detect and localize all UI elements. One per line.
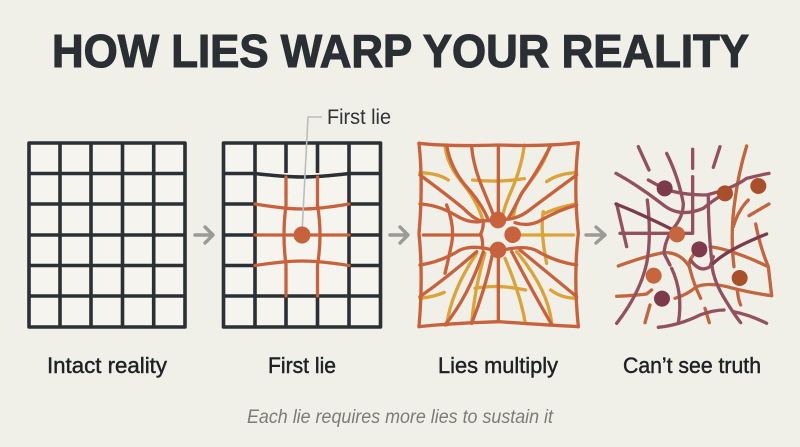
callout: first lie: First lie: [327, 105, 391, 129]
arrow: lies multiply to can't see truth: [586, 227, 605, 243]
dark plum fragments: [616, 204, 767, 263]
arrow: intact to first lie: [195, 227, 213, 243]
panel: intact reality grid: [29, 143, 185, 327]
leader line: first lie: [302, 117, 322, 233]
plum fragments: [616, 147, 769, 327]
panel: broken grid: [616, 146, 772, 327]
scattered lie nodes: [646, 178, 766, 307]
title: HOW LIES WARP YOUR REALITY: [52, 25, 749, 77]
label: first lie: First lie: [268, 353, 336, 378]
orange warped lines: [419, 143, 578, 327]
label: can't see truth: Can’t see truth: [623, 353, 761, 378]
label: intact reality: Intact reality: [47, 353, 168, 378]
arrow: first lie to lies multiply: [390, 227, 408, 243]
label: lies multiply: Lies multiply: [438, 353, 559, 378]
panel: first lie grid: [224, 117, 380, 327]
yellow warped lines: [420, 145, 577, 325]
footer caption: Each lie requires more lies to sustain it: [247, 407, 554, 428]
lie nodes: [490, 212, 521, 258]
distorted lines around first lie: [255, 177, 349, 296]
panel: lies multiply warped grid: [419, 143, 578, 327]
lie node: [294, 226, 310, 244]
orange fragments: [617, 146, 772, 323]
